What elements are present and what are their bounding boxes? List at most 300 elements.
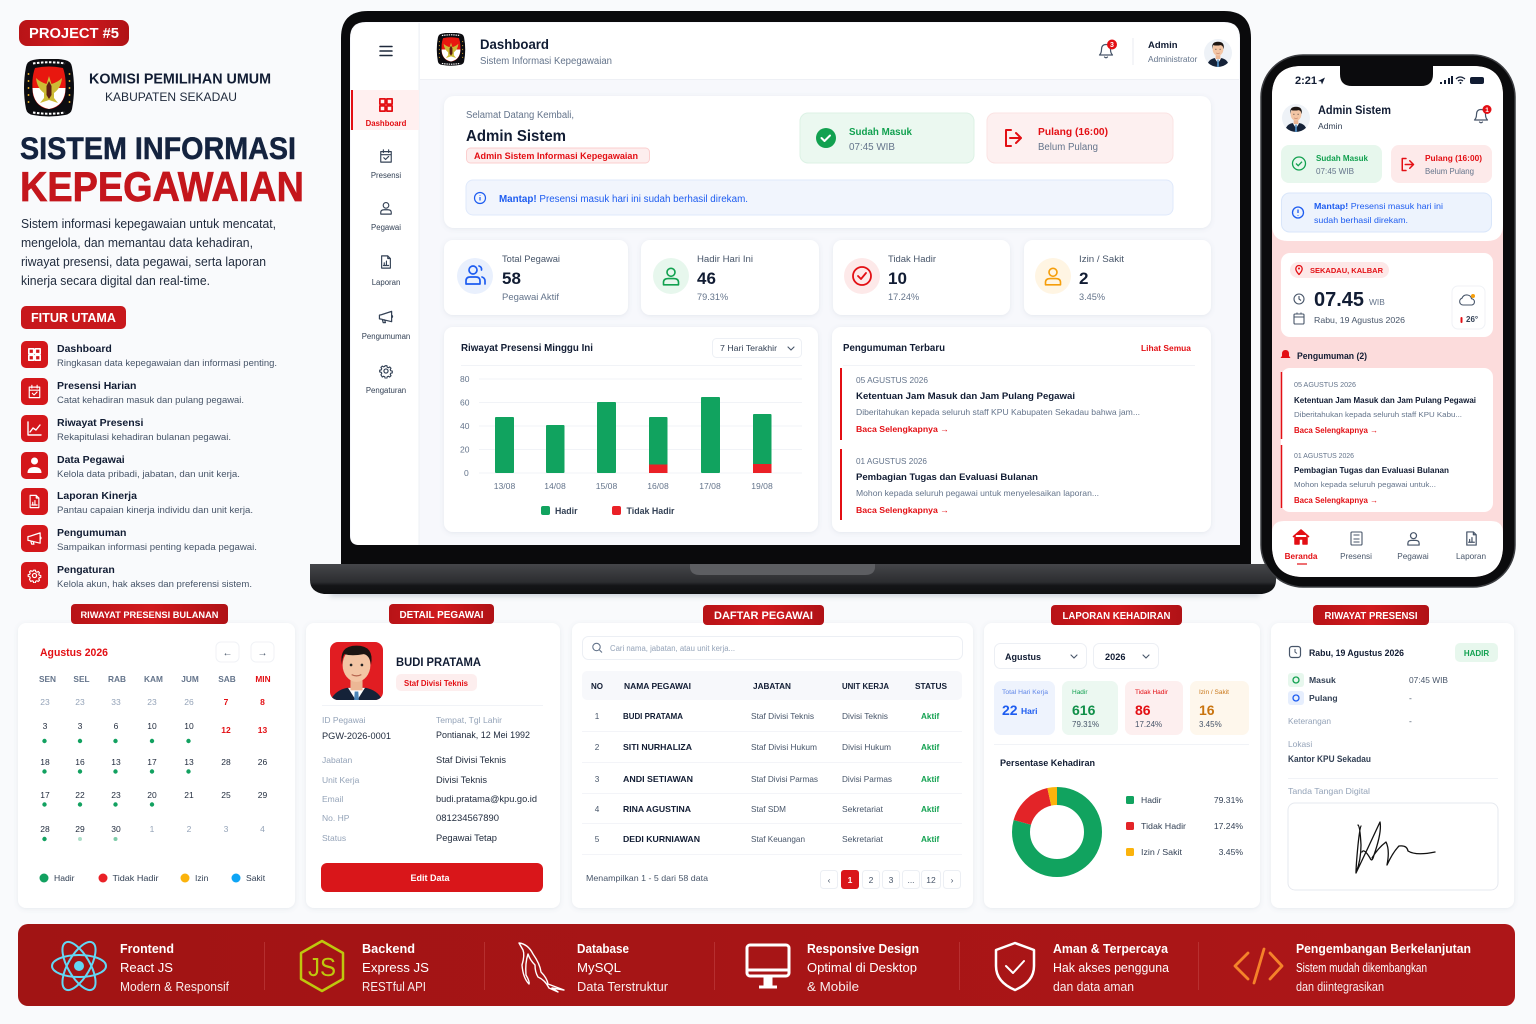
- description: [21, 217, 276, 288]
- tech: express: Express JS: [362, 961, 429, 975]
- row 2: 2: [595, 743, 600, 752]
- row 1: Staf Divisi Teknis: [751, 712, 814, 721]
- phone status: sudah masuk: Sudah Masuk: [1316, 154, 1369, 163]
- panel: daftar pegawai: [572, 605, 973, 908]
- row 3: Divisi Parmas: [842, 775, 892, 784]
- greeting: [466, 110, 574, 145]
- donut chart: [1021, 796, 1093, 868]
- footer tech banner: [18, 924, 1515, 1006]
- info alert: Mantap! Presensi masuk hari ini sudah berhasil direkam.: [499, 194, 748, 205]
- employee details: ID Pegawai: [322, 715, 366, 725]
- feature: pengaturan: Pengaturan: [57, 564, 115, 576]
- clock reading: Rabu, 19 Agustus 2026: [1314, 315, 1405, 325]
- feature: data pegawai: Kelola data pribadi, jabatan, dan unit kerja.: [57, 469, 240, 480]
- calendar grid: 28: [40, 824, 50, 834]
- tech: express: Backend: [362, 942, 415, 956]
- stat: tidak hadir: Tidak Hadir: [1135, 689, 1169, 696]
- donut legend: 79.31%: [1214, 795, 1243, 805]
- employee table: NAMA PEGAWAI: [624, 682, 691, 691]
- phone announcement 1: Baca Selengkapnya →: [1294, 426, 1378, 435]
- clock reading: [1294, 288, 1405, 325]
- bar chart: 14/08: [544, 481, 566, 491]
- feature: laporan kinerja: [21, 488, 253, 516]
- stat: hadir: Hadir: [1072, 689, 1088, 696]
- calendar grid: 18: [40, 757, 50, 767]
- row 5: Staf Keuangan: [751, 835, 805, 844]
- tech: development: Sistem mudah dikembangkan: [1296, 961, 1427, 975]
- pagination: [820, 870, 960, 889]
- item: pegawai: Pegawai: [371, 223, 401, 232]
- stat: total hari kerja: Hari: [1021, 706, 1038, 716]
- stat: hadir: 616: [1072, 702, 1096, 718]
- pagination: 12: [926, 875, 936, 885]
- status: pulang: Pulang (16:00): [1038, 127, 1108, 138]
- stat: izin sakit: Izin / Sakit: [1079, 254, 1124, 265]
- stat: total pegawai: Pegawai Aktif: [502, 292, 559, 302]
- status bar: 2:21: [1295, 75, 1317, 87]
- phone info alert: sudah berhasil direkam.: [1314, 215, 1408, 225]
- item: laporan: Laporan: [372, 278, 400, 287]
- row 1: 1: [595, 712, 600, 721]
- admin avatar: [1204, 39, 1232, 67]
- stat: tidak hadir: 86: [1135, 702, 1151, 718]
- weather: [1452, 286, 1485, 329]
- employee table: UNIT KERJA: [842, 682, 889, 691]
- phone announcement 2: 01 AGUSTUS 2026: [1294, 453, 1354, 460]
- lokasi: Kantor KPU Sekadau: [1288, 754, 1371, 764]
- phone announcement 2: [1282, 445, 1449, 508]
- lokasi: Lokasi: [1288, 739, 1312, 749]
- row 2: Divisi Hukum: [842, 743, 891, 752]
- signature: Tanda Tangan Digital: [1288, 786, 1370, 796]
- donut legend: [1126, 795, 1243, 857]
- sidebar: [351, 23, 419, 545]
- tab: beranda: Beranda: [1285, 552, 1318, 561]
- lokasi: [1288, 739, 1371, 764]
- calendar header: ←: [222, 648, 232, 659]
- bar chart: 13/08: [494, 481, 515, 491]
- header title: Dashboard: [480, 37, 549, 52]
- announcement 1: 05 AGUSTUS 2026: [856, 376, 928, 385]
- stat: total pegawai: [444, 240, 628, 315]
- phone status: pulang: Belum Pulang: [1425, 167, 1474, 176]
- status: sudah masuk: [800, 113, 974, 163]
- stat: izin sakit: 3.45%: [1079, 292, 1105, 302]
- tech: express: RESTful API: [362, 980, 426, 994]
- announcements panel: [832, 327, 1211, 532]
- calendar grid: MIN: [255, 674, 271, 684]
- donut legend: 3.45%: [1219, 847, 1243, 857]
- chart legend: [541, 506, 675, 516]
- row 5: DEDI KURNIAWAN: [623, 835, 700, 844]
- tech: development: dan diintegrasikan: [1296, 980, 1384, 994]
- calendar grid: SEL: [73, 674, 90, 684]
- item: pengaturan: [366, 366, 406, 395]
- notification bell: 3: [1110, 42, 1114, 49]
- clock reading: 07.45: [1314, 288, 1364, 311]
- chart panel: [444, 327, 818, 532]
- feature: dashboard: Ringkasan data kepegawaian dan informasi penting.: [57, 358, 277, 369]
- tech: mysql: MySQL: [577, 961, 621, 975]
- calendar grid: SAB: [218, 674, 236, 684]
- calendar grid: 33: [111, 697, 121, 707]
- calendar grid: 1: [150, 824, 155, 834]
- pulang row: -: [1409, 693, 1412, 703]
- row 3: 3: [595, 775, 600, 784]
- header logo: [437, 33, 465, 66]
- bar chart: 60: [460, 398, 470, 408]
- row 4: Staf SDM: [751, 805, 786, 814]
- top bar: [420, 33, 1239, 80]
- laptop base: [310, 564, 1276, 594]
- calendar grid: 30: [111, 824, 121, 834]
- employee details: Jabatan: [322, 755, 353, 765]
- tech: express: [301, 941, 429, 994]
- status bar: [1295, 75, 1484, 87]
- donut heading: Persentase Kehadiran: [1000, 758, 1095, 768]
- row 4: RINA AGUSTINA: [623, 805, 691, 814]
- phone: [1261, 55, 1515, 587]
- item: pengaturan: Pengaturan: [366, 386, 406, 395]
- stat: tidak hadir: Tidak Hadir: [888, 254, 937, 265]
- stat: hadir: 46: [697, 269, 716, 288]
- phone screen: [1272, 66, 1503, 577]
- bar chart: 80: [460, 374, 470, 384]
- calendar grid: 10: [147, 721, 157, 731]
- phone announcement card: [1281, 368, 1493, 512]
- announcement 1: Diberitahukan kepada seluruh staff KPU Kabupaten Sekadau bahwa jam...: [856, 407, 1140, 417]
- announcements heading: [843, 343, 1191, 354]
- stat: izin sakit: 2: [1079, 269, 1088, 288]
- calendar grid: 28: [221, 757, 231, 767]
- feature: pengumuman: Pengumuman: [57, 527, 126, 539]
- info alert: [466, 180, 1173, 215]
- phone user header: Admin: [1318, 121, 1343, 131]
- month and year selectors: [994, 644, 1158, 668]
- calendar grid: 26: [258, 757, 267, 767]
- row 3: Staf Divisi Parmas: [751, 775, 818, 784]
- row 4: 4: [595, 805, 600, 814]
- status: pulang: [987, 113, 1173, 163]
- tech: react: [52, 937, 229, 995]
- stat: tidak hadir: [1125, 681, 1183, 735]
- calendar grid: 3: [78, 721, 83, 731]
- stat: izin sakit: 3.45%: [1199, 720, 1222, 729]
- calendar grid: 2: [187, 824, 192, 834]
- pagination: ‹: [828, 875, 831, 885]
- date row: HADIR: [1464, 649, 1489, 658]
- phone body: [1261, 55, 1515, 587]
- calendar legend: [40, 873, 266, 883]
- calendar grid: 23: [40, 697, 50, 707]
- edit button: [321, 863, 543, 892]
- panel: laporan kehadiran: [984, 605, 1260, 908]
- search box: [582, 636, 962, 660]
- employee details: PGW-2026-0001: [322, 731, 391, 741]
- calendar grid: 6: [114, 721, 119, 731]
- weather: 26°: [1466, 315, 1478, 324]
- feature list: [21, 341, 277, 590]
- item: presensi: [371, 150, 401, 180]
- masuk row: [1288, 673, 1448, 687]
- item: pengumuman: Pengumuman: [362, 332, 410, 341]
- item: pegawai: [371, 203, 401, 232]
- organisation name: [89, 72, 271, 104]
- tech: responsive: & Mobile: [807, 980, 859, 994]
- announcement 1: [841, 368, 1140, 440]
- tech: express: JS: [308, 952, 336, 982]
- donut legend: Izin / Sakit: [1141, 847, 1183, 857]
- phone announcement 1: Ketentuan Jam Masuk dan Jam Pulang Pegawai: [1294, 396, 1476, 405]
- calendar legend: Tidak Hadir: [112, 873, 159, 883]
- tag: [1313, 605, 1429, 625]
- organisation name: KOMISI PEMILIHAN UMUM: [89, 72, 271, 88]
- tag: RIWAYAT PRESENSI: [1324, 611, 1418, 622]
- tag: DETAIL PEGAWAI: [400, 610, 484, 621]
- search box: Cari nama, jabatan, atau unit kerja...: [610, 644, 735, 653]
- phone user header: [1282, 104, 1492, 132]
- employee details: Email: [322, 794, 343, 804]
- row 3: [595, 775, 939, 784]
- stat: hadir: 79.31%: [1072, 720, 1099, 729]
- feature: pengaturan: [21, 562, 252, 590]
- tech: react: React JS: [120, 961, 173, 975]
- calendar grid: [39, 674, 271, 841]
- calendar grid: 13: [258, 725, 267, 735]
- row 5: Aktif: [921, 835, 939, 844]
- row 1: [595, 712, 939, 721]
- role pill: Admin Sistem Informasi Kepegawaian: [474, 151, 638, 161]
- panel: riwayat presensi bulanan: [18, 604, 295, 908]
- status: pulang: Belum Pulang: [1038, 142, 1098, 153]
- tag: LAPORAN KEHADIRAN: [1062, 611, 1170, 622]
- signature: [1288, 786, 1498, 890]
- organisation name: KABUPATEN SEKADAU: [105, 90, 237, 104]
- feature: dashboard: [21, 341, 277, 369]
- keterangan: -: [1409, 716, 1412, 726]
- KPU logo: [24, 58, 74, 116]
- masuk row: 07:45 WIB: [1409, 675, 1448, 685]
- calendar grid: 4: [260, 824, 265, 834]
- phone announcement 1: [1282, 372, 1476, 439]
- bar chart: 16/08: [647, 481, 669, 491]
- bar chart: 17/08: [699, 481, 721, 491]
- stat: total hari kerja: 22: [1002, 702, 1018, 718]
- item: laporan: [372, 256, 400, 287]
- phone status: pulang: [1391, 145, 1492, 183]
- phone user header: Admin Sistem: [1318, 105, 1391, 117]
- calendar grid: 23: [147, 697, 157, 707]
- tech: security: Aman & Terpercaya: [1053, 942, 1169, 956]
- feature: data pegawai: Data Pegawai: [57, 454, 125, 466]
- calendar header: Agustus 2026: [40, 647, 108, 659]
- calendar grid: 17: [40, 790, 50, 800]
- calendar grid: 7: [224, 697, 229, 707]
- calendar grid: 3: [43, 721, 48, 731]
- tab: presensi: Presensi: [1340, 552, 1372, 561]
- announcement 2: 01 AGUSTUS 2026: [856, 457, 927, 466]
- tech: development: [1235, 942, 1471, 994]
- description: riwayat presensi, data pegawai, serta laporan: [21, 255, 266, 269]
- feature: laporan kinerja: Laporan Kinerja: [57, 490, 137, 502]
- phone announcement 2: Pembagian Tugas dan Evaluasi Bulanan: [1294, 466, 1449, 475]
- tech: responsive: [747, 942, 919, 994]
- tech: mysql: Database: [577, 942, 629, 956]
- stat: total pegawai: 58: [502, 269, 521, 288]
- tag: RIWAYAT PRESENSI BULANAN: [80, 610, 219, 621]
- laptop shadow: [330, 590, 1260, 596]
- phone info alert: Mantap! Presensi masuk hari ini: [1314, 201, 1443, 211]
- phone clock card: [1281, 253, 1493, 337]
- announcement 1: Baca Selengkapnya →: [856, 424, 949, 434]
- calendar grid: JUM: [181, 674, 199, 684]
- calendar grid: 25: [221, 790, 231, 800]
- tab: presensi: [1340, 532, 1372, 561]
- employee details: 081234567890: [436, 813, 499, 823]
- row 4: Sekretariat: [842, 805, 884, 814]
- panel: detail pegawai: [306, 604, 560, 908]
- greeting: Admin Sistem: [466, 128, 566, 145]
- calendar legend: Hadir: [54, 873, 75, 883]
- stat: tidak hadir: 17.24%: [1135, 720, 1162, 729]
- calendar grid: 23: [75, 697, 85, 707]
- tech: react: Frontend: [120, 942, 174, 956]
- phone announcement 1: 05 AGUSTUS 2026: [1294, 382, 1356, 389]
- pagination: 3: [889, 875, 894, 885]
- pulang row: Pulang: [1309, 693, 1338, 703]
- project badge: [19, 20, 129, 46]
- calendar grid: 8: [260, 697, 265, 707]
- range dropdown: [712, 338, 802, 358]
- calendar legend: Sakit: [246, 873, 266, 883]
- announcement 2: Baca Selengkapnya →: [856, 505, 949, 515]
- welcome card: [444, 96, 1211, 228]
- greeting: Selamat Datang Kembali,: [466, 110, 574, 121]
- row 2: Aktif: [921, 743, 939, 752]
- row 5: [595, 835, 939, 844]
- row 1: Aktif: [921, 712, 939, 721]
- calendar grid: 29: [75, 824, 85, 834]
- item: pengumuman: [362, 311, 410, 341]
- keterangan: [1288, 716, 1412, 726]
- date row: [1290, 643, 1498, 662]
- feature: presensi harian: Presensi Harian: [57, 380, 136, 392]
- stat: total hari kerja: [994, 681, 1055, 735]
- calendar grid: 12: [221, 725, 231, 735]
- fitur utama heading: FITUR UTAMA: [31, 311, 116, 325]
- employee table: NO: [591, 682, 603, 691]
- employee details: Pegawai Tetap: [436, 833, 497, 843]
- employee table: [582, 671, 962, 854]
- main title: KEPEGAWAIAN: [20, 163, 304, 210]
- tech: development: Pengembangan Berkelanjutan: [1296, 942, 1471, 956]
- employee table: JABATAN: [753, 682, 791, 691]
- feature: laporan kinerja: Pantau capaian kinerja individu dan unit kerja.: [57, 505, 253, 516]
- calendar legend: Izin: [195, 873, 209, 883]
- feature: presensi harian: Catat kehadiran masuk dan pulang pegawai.: [57, 395, 244, 406]
- row 3: Aktif: [921, 775, 939, 784]
- tag: [71, 604, 228, 624]
- calendar grid: RAB: [108, 674, 126, 684]
- stat: hadir: 79.31%: [697, 292, 728, 302]
- tech: mysql: [519, 942, 668, 994]
- item: presensi: Presensi: [371, 171, 401, 180]
- announcement 2: Mohon kepada seluruh pegawai untuk menyelesaikan laporan...: [856, 488, 1099, 498]
- calendar grid: SEN: [39, 674, 56, 684]
- bar chart: 15/08: [596, 481, 617, 491]
- tab: pegawai: [1397, 533, 1429, 561]
- calendar grid: KAM: [144, 674, 163, 684]
- tech: security: dan data aman: [1053, 980, 1134, 994]
- user info: [1133, 38, 1198, 65]
- announcement 2: Pembagian Tugas dan Evaluasi Bulanan: [856, 471, 1038, 482]
- bar chart: [460, 366, 802, 491]
- employee details: Pontianak, 12 Mei 1992: [436, 730, 530, 740]
- main title: [20, 130, 304, 210]
- tag: [703, 605, 824, 625]
- phone status: pulang: Pulang (16:00): [1425, 154, 1482, 163]
- description: Sistem informasi kepegawaian untuk mencatat,: [21, 217, 276, 231]
- employee name: [396, 657, 481, 691]
- phone info alert: [1282, 193, 1492, 232]
- announcement 2: [841, 449, 1099, 520]
- main title: SISTEM INFORMASI: [20, 130, 296, 166]
- location pill: [1290, 262, 1389, 278]
- feature: dashboard: Dashboard: [57, 343, 112, 355]
- stat: izin sakit: [1190, 681, 1249, 735]
- header title: Sistem Informasi Kepegawaian: [480, 56, 612, 67]
- chart title: Riwayat Presensi Minggu Ini: [461, 343, 593, 354]
- employee name: BUDI PRATAMA: [396, 657, 481, 669]
- month and year selectors: Agustus: [1005, 652, 1041, 662]
- tech: react: Modern & Responsif: [120, 980, 229, 994]
- active item: dashboard: Dashboard: [366, 119, 407, 128]
- row 5: 5: [595, 835, 600, 844]
- feature: pengumuman: Sampaikan informasi penting kepada pegawai.: [57, 542, 257, 553]
- calendar grid: 23: [111, 790, 121, 800]
- announcement 1: Ketentuan Jam Masuk dan Jam Pulang Pegawai: [856, 390, 1075, 401]
- row 2: SITI NURHALIZA: [623, 743, 692, 752]
- tab: laporan: Laporan: [1456, 552, 1486, 561]
- tag: DAFTAR PEGAWAI: [714, 610, 813, 622]
- phone announcement 1: Diberitahukan kepada seluruh staff KPU Kabu...: [1294, 410, 1462, 419]
- table summary: Menampilkan 1 - 5 dari 58 data: [586, 873, 708, 883]
- stat: izin sakit: [1024, 240, 1211, 315]
- tab: beranda: [1285, 530, 1318, 564]
- phone announcement 2: Baca Selengkapnya →: [1294, 496, 1378, 505]
- row 2: Staf Divisi Hukum: [751, 743, 817, 752]
- pulang row: [1288, 691, 1412, 705]
- stat: hadir: Hadir Hari Ini: [697, 254, 753, 265]
- user info: Admin: [1148, 40, 1178, 51]
- stat: izin sakit: 16: [1199, 702, 1215, 718]
- employee details: Unit Kerja: [322, 775, 360, 785]
- project badge: PROJECT #5: [29, 26, 119, 42]
- calendar grid: 3: [224, 824, 229, 834]
- pagination: ...: [907, 875, 915, 885]
- bar chart: 0: [464, 468, 469, 478]
- tag: [1051, 605, 1182, 625]
- feature: riwayat presensi: [21, 415, 231, 443]
- active item: dashboard: [351, 90, 419, 130]
- announcements heading: Pengumuman Terbaru: [843, 343, 945, 354]
- row 5: Sekretariat: [842, 835, 884, 844]
- employee table: STATUS: [915, 682, 948, 691]
- phone announcement 2: Mohon kepada seluruh pegawai untuk...: [1294, 480, 1436, 489]
- laptop bezel: [341, 11, 1251, 564]
- chart legend: Hadir: [555, 506, 578, 516]
- clock reading: WIB: [1369, 297, 1385, 307]
